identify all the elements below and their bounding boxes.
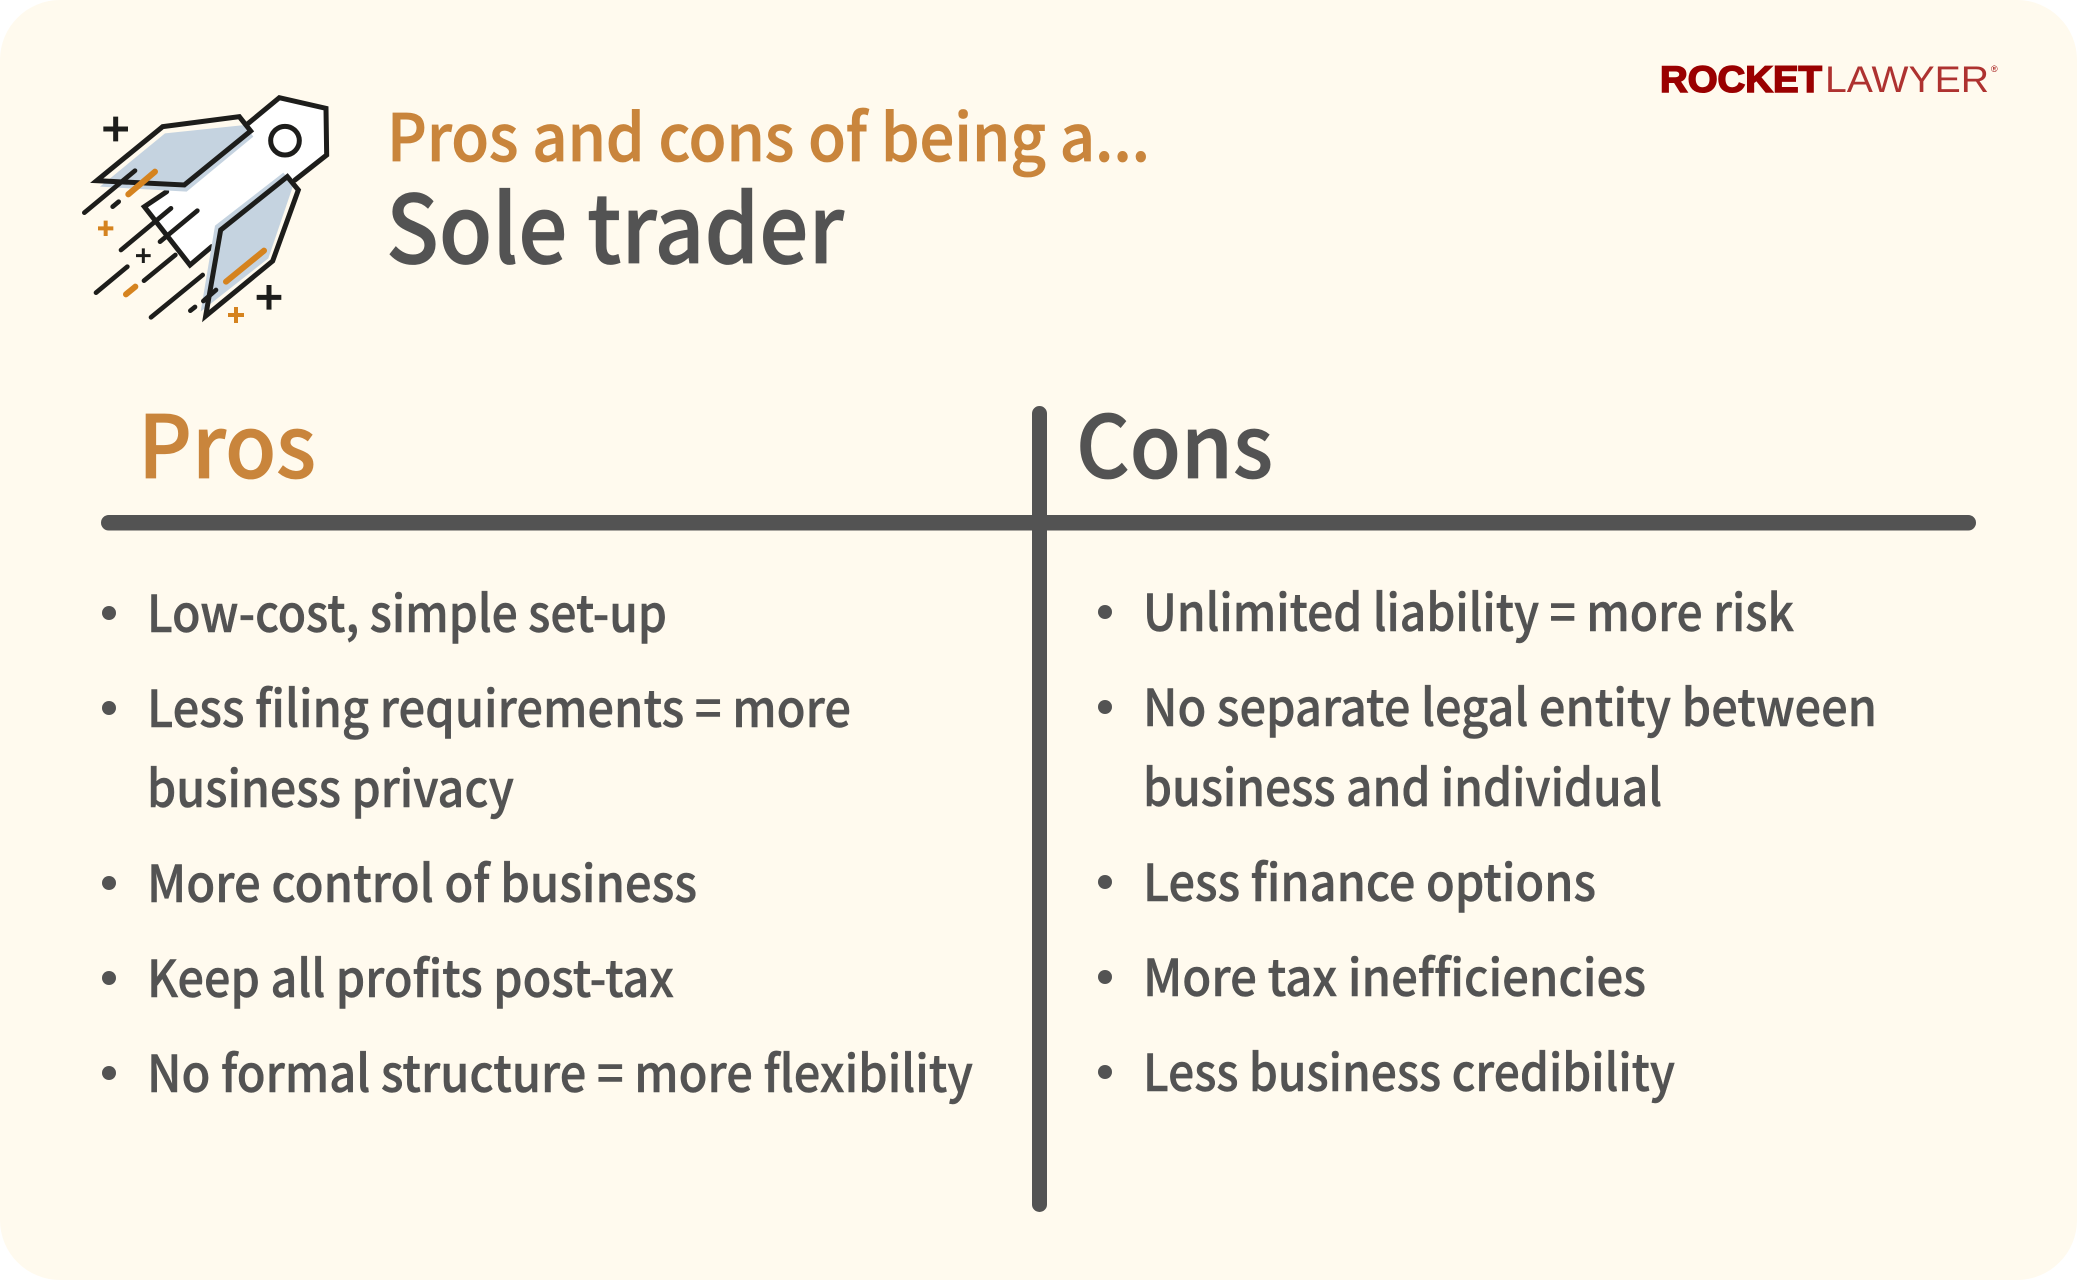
horizontal divider — [101, 515, 1976, 530]
icon: rocket — [84, 98, 327, 323]
heading: title: Sole trader — [386, 155, 845, 291]
logo: Rocket Lawyer: ROCKET — [1660, 59, 1822, 100]
heading: Pros: Pros — [138, 378, 316, 504]
list: cons: business and individual — [1143, 747, 1662, 821]
heading: subtitle: Pros and cons of being a... — [387, 86, 1150, 180]
list: cons: Less business credibility — [1143, 1032, 1675, 1106]
list: pros: business privacy — [147, 748, 514, 822]
logo: Rocket Lawyer — [1660, 59, 1998, 100]
list: pros: More control of business — [147, 843, 697, 917]
list: pros: Low-cost, simple set-up — [147, 573, 667, 647]
list: pros: No formal structure = more flexibility — [147, 1033, 973, 1107]
list: cons: More tax inefficiencies — [1143, 937, 1646, 1011]
logo: Rocket Lawyer: ® — [1991, 64, 1998, 74]
heading: Cons: Cons — [1076, 378, 1273, 504]
list: pros: Keep all profits post-tax — [147, 938, 674, 1012]
vertical divider — [1032, 406, 1047, 1212]
logo: Rocket Lawyer: LAWYER — [1825, 59, 1989, 100]
list: cons: Less finance options — [1143, 842, 1596, 916]
list: cons: No separate legal entity between — [1143, 667, 1877, 741]
list: cons: Unlimited liability = more risk — [1143, 572, 1794, 646]
list: pros: Less filing requirements = more — [147, 668, 851, 742]
list: pros — [102, 573, 973, 1107]
list: cons — [1098, 572, 1877, 1106]
